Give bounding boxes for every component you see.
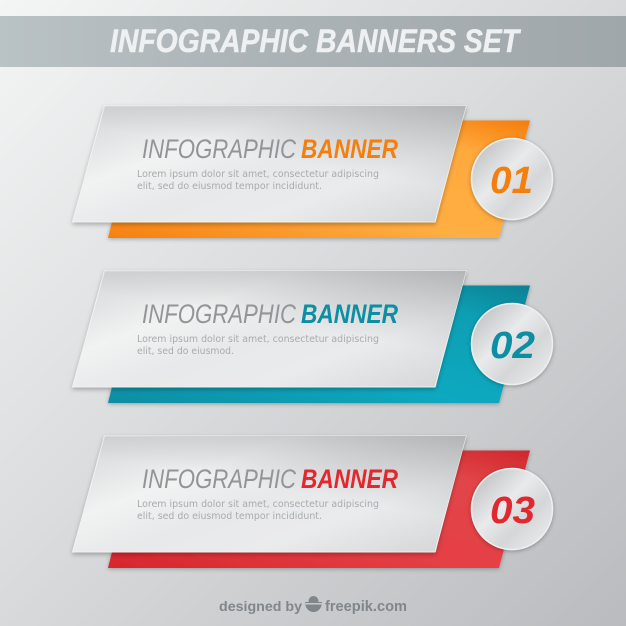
- grey panel 01: [72, 106, 466, 222]
- body text 01: Lorem ipsum dolor sit amet, consectetur adipiscing: [137, 169, 379, 180]
- accent heading 03: BANNER: [301, 464, 398, 494]
- credit line: freepik.com: [325, 599, 407, 615]
- accent heading 02: BANNER: [301, 299, 398, 329]
- body text 02: elit, sed do eiusmod.: [137, 346, 234, 357]
- credit line: designed by: [219, 598, 302, 614]
- colour ribbon 03: [108, 450, 530, 568]
- number badge 02: 02: [490, 325, 535, 367]
- banner 03: [72, 436, 552, 568]
- body text 02: Lorem ipsum dolor sit amet, consectetur adipiscing: [137, 334, 379, 345]
- number badge 03: [472, 468, 552, 550]
- number badge 01: 01: [490, 160, 533, 202]
- number badge 02: [472, 304, 552, 384]
- title: INFOGRAPHIC BANNERS SET: [110, 23, 521, 59]
- colour ribbon 01: [108, 120, 530, 238]
- banner 02: [72, 271, 552, 403]
- heading 03: INFOGRAPHIC: [142, 464, 296, 494]
- grey panel 03: [72, 436, 466, 552]
- heading 02: INFOGRAPHIC: [142, 299, 296, 329]
- credit line: [219, 596, 407, 615]
- body text 03: Lorem ipsum dolor sit amet, consectetur adipiscing: [137, 499, 379, 510]
- number badge 03: 03: [490, 490, 535, 532]
- accent heading 01: BANNER: [301, 134, 398, 164]
- colour ribbon 02: [108, 286, 530, 403]
- grey panel 02: [72, 271, 466, 387]
- heading 01: INFOGRAPHIC: [142, 134, 296, 164]
- body text 01: elit, sed do eiusmod tempor incididunt.: [137, 181, 322, 192]
- body text 03: elit, sed do eiusmod tempor incididunt.: [137, 511, 322, 522]
- icon: freepik logo: [304, 596, 323, 612]
- title bar: [0, 16, 626, 67]
- banner 01: [72, 106, 552, 238]
- number badge 01: [472, 138, 552, 220]
